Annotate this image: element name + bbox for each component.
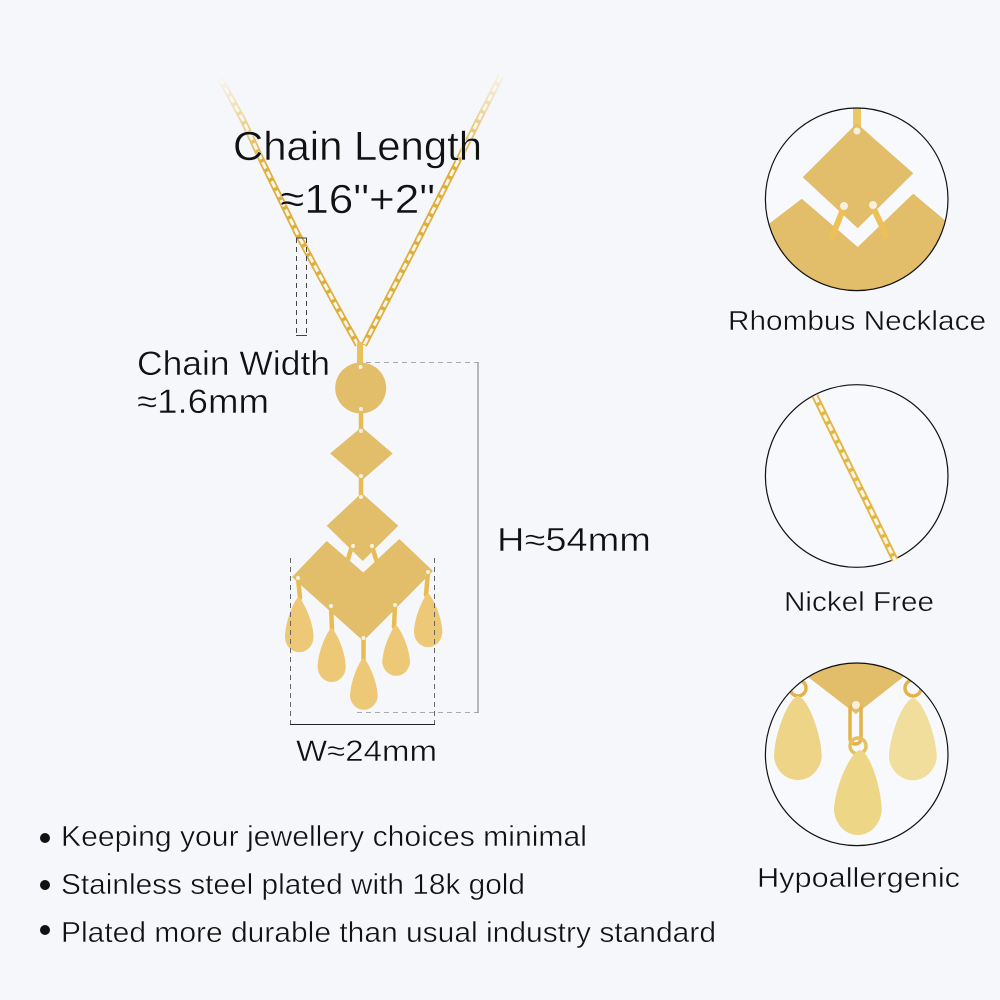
pendant <box>285 362 442 710</box>
feature list <box>40 821 716 949</box>
heading: chain length <box>233 123 482 222</box>
pendant disc <box>335 362 386 414</box>
caption: rhombus necklace: Rhombus Necklace <box>728 305 986 336</box>
feature list: Stainless steel plated with 18k gold <box>61 869 525 901</box>
middle diamond <box>327 493 398 561</box>
upper diamond <box>330 427 393 480</box>
heading: chain length: ≈16"+2" <box>280 176 435 222</box>
ring holes <box>296 365 430 640</box>
necklace chain <box>220 76 501 366</box>
teardrop charms <box>285 593 442 710</box>
width dimension <box>290 558 435 724</box>
label: height: H≈54mm <box>497 521 651 558</box>
detail: hypoallergenic charms <box>765 660 948 846</box>
detail: nickel free chain <box>765 385 948 567</box>
label: chain width: ≈1.6mm <box>137 383 269 421</box>
height dimension <box>357 362 478 713</box>
chevron plate <box>293 540 432 640</box>
feature list: Keeping your jewellery choices minimal <box>61 821 587 853</box>
label: chain width: Chain Width <box>137 345 330 383</box>
caption: hypoallergenic: Hypoallergenic <box>757 862 960 893</box>
chain width dimension <box>296 238 307 336</box>
label: chain width <box>137 345 330 421</box>
detail: rhombus necklace <box>764 107 949 292</box>
feature list: Plated more durable than usual industry standard <box>61 917 716 949</box>
connector rings <box>298 410 428 660</box>
label: width: W≈24mm <box>296 735 437 768</box>
caption: nickel free: Nickel Free <box>784 586 934 617</box>
heading: chain length: Chain Length <box>233 123 482 169</box>
